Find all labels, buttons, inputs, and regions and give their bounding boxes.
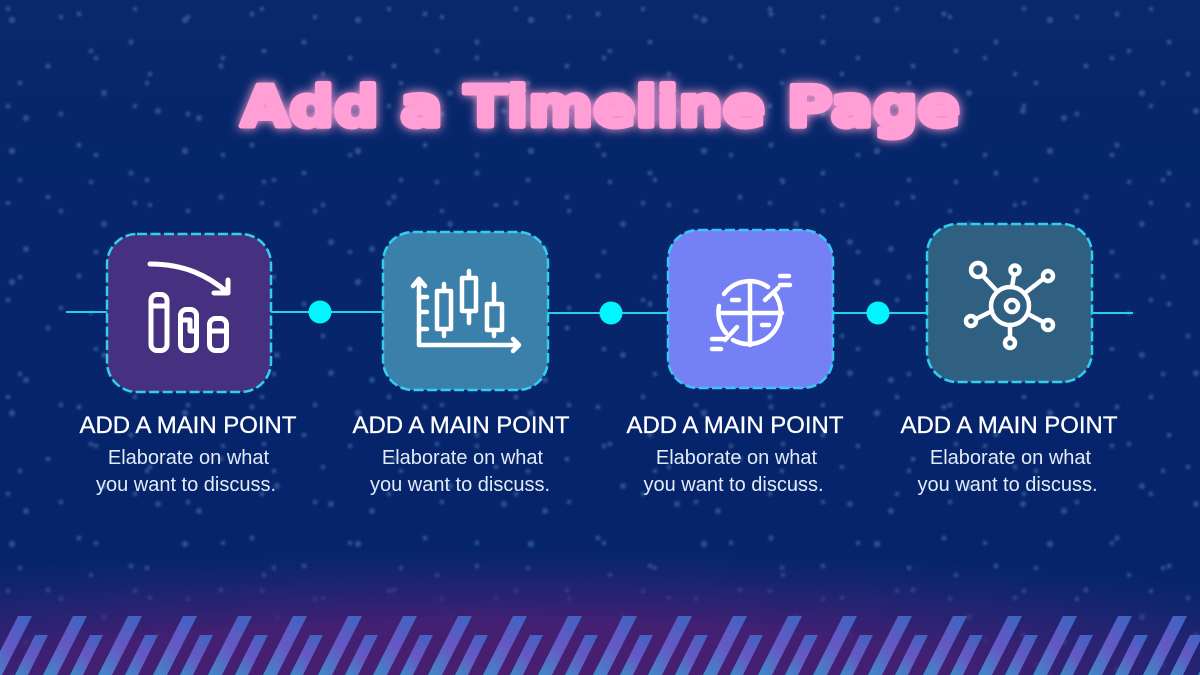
bottom stripes (0, 616, 1200, 675)
panel: card 1 (107, 234, 271, 392)
timeline dot 2 (600, 302, 622, 324)
timeline dot 3 (866, 302, 890, 324)
icon: candlestick chart (413, 271, 519, 351)
text block: point 1: Elaborate on what (108, 447, 270, 469)
text block: point 2 (352, 412, 570, 496)
text block: point 4 (900, 412, 1118, 496)
title: Add a Timeline Page (241, 75, 960, 140)
text block: point 2: ADD A MAIN POINT (352, 412, 570, 439)
text block: point 4: ADD A MAIN POINT (900, 412, 1118, 439)
panel: card 4 (927, 224, 1092, 382)
text block: point 3: ADD A MAIN POINT (626, 412, 844, 439)
text block: point 1: ADD A MAIN POINT (80, 412, 297, 439)
text block: point 3 (626, 412, 844, 496)
panel: card 3 (668, 230, 833, 388)
panel: card 2 (383, 232, 548, 390)
text block: point 4: you want to discuss. (917, 474, 1098, 496)
icon: descending bars with arrow (150, 264, 228, 350)
text block: point 2: Elaborate on what (382, 447, 544, 469)
text block: point 2: you want to discuss. (370, 474, 550, 496)
text block: point 1 (80, 412, 297, 496)
text block: point 3: you want to discuss. (643, 474, 824, 496)
timeline dot 1 (308, 300, 332, 324)
icon: network hub (966, 263, 1053, 348)
text block: point 3: Elaborate on what (656, 447, 818, 469)
icon: pie chart (712, 276, 790, 349)
text block: point 1: you want to discuss. (96, 474, 276, 496)
text block: point 4: Elaborate on what (930, 447, 1092, 469)
timeline connector line (66, 312, 1133, 313)
